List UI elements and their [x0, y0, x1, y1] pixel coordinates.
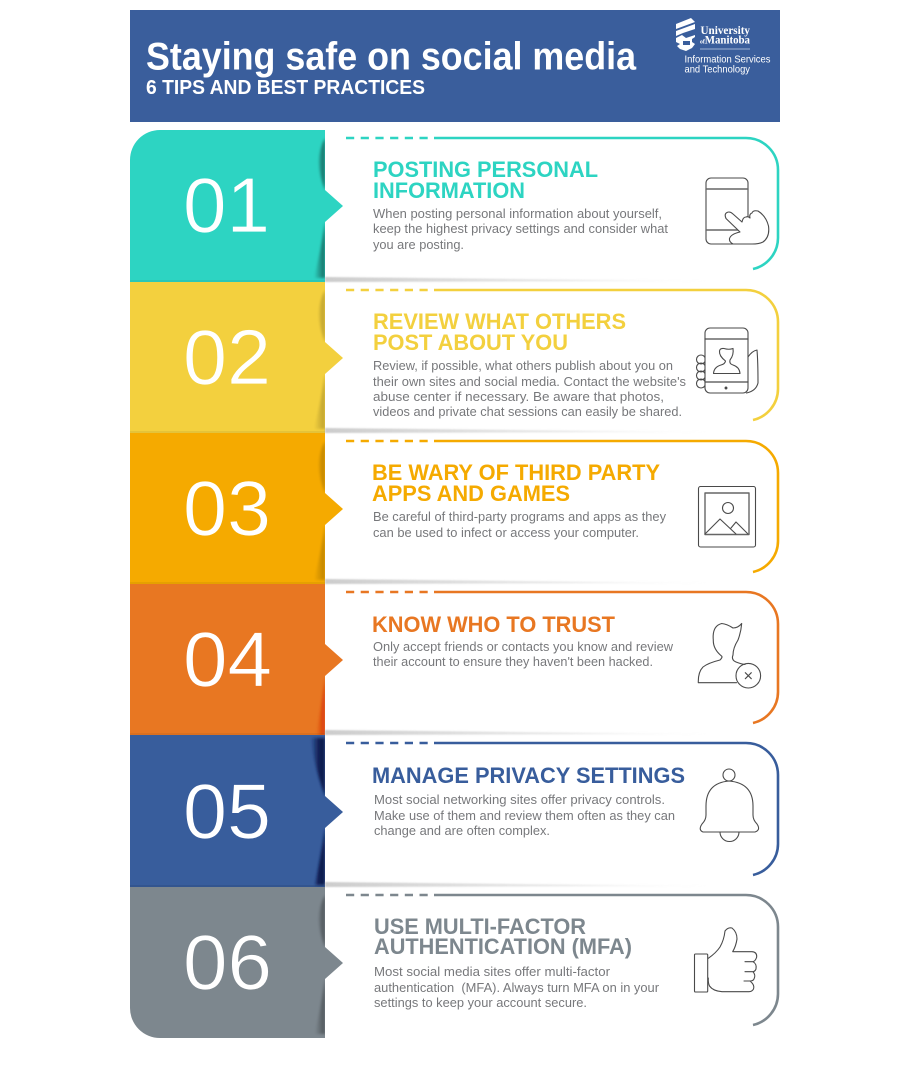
body text 05: Make use of them and review them often as they can [374, 808, 675, 823]
heading 03 [372, 460, 660, 506]
body text 06 [374, 964, 660, 1010]
body text 05 [374, 792, 675, 838]
number block 06: 06 [183, 918, 272, 1006]
icon: phone with tapping hand [706, 178, 769, 244]
body text 01: keep the highest privacy settings and consider what [373, 221, 668, 236]
heading 04: KNOW WHO TO TRUST [372, 612, 616, 637]
card outline 02 [346, 290, 778, 420]
body text 02: their own sites and social media. Contact the website's [373, 374, 686, 389]
card outline 06 [346, 895, 778, 1025]
title: Staying safe on social media [146, 36, 636, 78]
body text 05: Most social networking sites offer privacy controls. [374, 792, 665, 807]
body text 01: you are posting. [373, 237, 464, 252]
card outline 01 [346, 138, 778, 269]
number block 04: 04 [183, 615, 272, 703]
body text 06: settings to keep your account secure. [374, 995, 587, 1010]
logo: University of Manitoba [676, 18, 770, 76]
panel: tip 04 [130, 584, 778, 735]
body text 05: change and are often complex. [374, 823, 550, 838]
panel: tip 01 [130, 130, 778, 282]
heading 06 [374, 914, 632, 959]
panel: tip 03 [130, 433, 778, 584]
heading 05: MANAGE PRIVACY SETTINGS [372, 763, 685, 788]
logo: University of Manitoba: University [700, 25, 750, 37]
panel: tip 05 [130, 735, 778, 887]
panel: tip 02 [130, 282, 778, 433]
logo: University of Manitoba: and Technology [684, 64, 751, 76]
icon: thumbs up [694, 928, 757, 992]
heading 03: APPS AND GAMES [372, 481, 570, 506]
body text 03: Be careful of third-party programs and apps as they [373, 509, 666, 524]
number block 05 [130, 735, 343, 887]
body text 03: can be used to infect or access your computer. [373, 525, 639, 540]
body text 06: authentication (MFA). Always turn MFA on in your [374, 980, 660, 995]
heading 06: USE MULTI-FACTOR [374, 914, 586, 939]
number block 01: 01 [183, 161, 270, 249]
heading 01: INFORMATION [373, 178, 525, 203]
body text 06: Most social media sites offer multi-factor [374, 964, 611, 979]
panel: tip 06 [130, 887, 778, 1038]
icon: bell [700, 769, 759, 842]
card outline 05 [346, 743, 778, 875]
card outline 04 [346, 592, 778, 723]
icon: picture frame [698, 486, 756, 547]
subtitle: 6 TIPS AND BEST PRACTICES [146, 77, 425, 99]
number block 03: 03 [183, 464, 271, 552]
number block 03 [130, 433, 343, 584]
logo: University of Manitoba: Information Services [684, 54, 770, 66]
logo: University of Manitoba: ofManitoba [700, 34, 750, 46]
body text 04: Only accept friends or contacts you know and review [373, 639, 674, 654]
heading 02: REVIEW WHAT OTHERS [373, 309, 626, 334]
body text 02: videos and private chat sessions can easily be shared. [373, 404, 682, 419]
heading 06: AUTHENTICATION (MFA) [374, 934, 632, 959]
card outline 03 [346, 441, 778, 572]
body text 02: abuse center if necessary. Be aware that photos, [373, 389, 664, 404]
body text 03 [373, 509, 666, 540]
body text 01 [373, 206, 668, 252]
heading 02: POST ABOUT YOU [373, 330, 568, 355]
icon: phone with user profile in hand [696, 328, 758, 393]
body text 02 [373, 358, 686, 419]
body text 04 [373, 639, 674, 669]
number block 01 [130, 130, 343, 282]
number block 05: 05 [183, 767, 271, 855]
header banner [130, 10, 780, 122]
heading 02 [373, 309, 626, 355]
number block 04 [130, 584, 343, 735]
body text 02: Review, if possible, what others publish about you on [373, 358, 673, 373]
icon: user with remove badge [698, 624, 761, 688]
body text 01: When posting personal information about yourself, [373, 206, 662, 221]
number block 06 [130, 887, 343, 1038]
heading 03: BE WARY OF THIRD PARTY [372, 460, 660, 485]
number block 02 [130, 282, 343, 433]
body text 04: their account to ensure they haven't been hacked. [373, 654, 653, 669]
number block 02: 02 [183, 313, 271, 401]
heading 01: POSTING PERSONAL [373, 157, 598, 182]
heading 01 [373, 157, 598, 203]
